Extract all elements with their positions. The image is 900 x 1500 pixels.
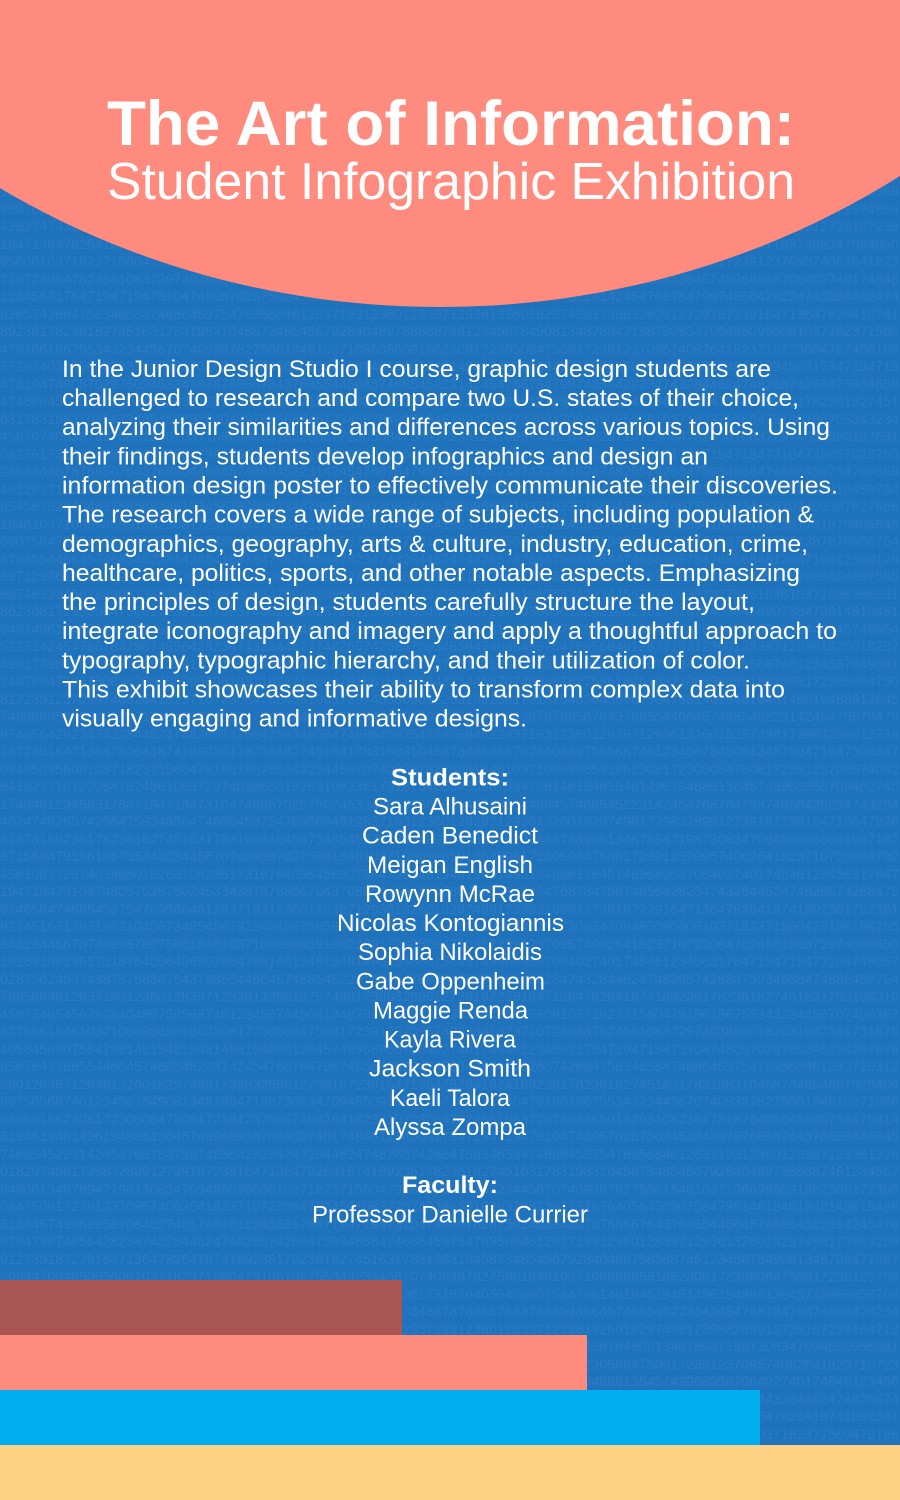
course description text block: information design poster to effectively communicate their discoveries. [62,472,838,500]
course description text block: healthcare, politics, sports, and other notable aspects. Emphasizing [62,560,800,587]
course description text block: demographics, geography, arts & culture, industry, education, crime, [62,531,808,558]
course description text block: analyzing their similarities and differences across various topics. Using [62,414,830,441]
students list: Nicolas Kontogiannis [337,910,564,937]
faculty heading: Faculty: [402,1172,498,1199]
students list: Meigan English [367,852,533,879]
students list: Jackson Smith [369,1056,531,1082]
header curved salmon shape [0,0,900,307]
course description text block: This exhibit showcases their ability to transform complex data into [62,676,785,704]
course description text block: visually engaging and informative designs. [62,706,527,732]
students list: Gabe Oppenheim [356,968,545,996]
bar: salmon [0,1335,587,1390]
faculty block: Professor Danielle Currier [312,1202,588,1228]
bar: bright blue [0,1390,760,1445]
students list: Kaeli Talora [390,1085,510,1112]
course description text block: their findings, students develop infographics and design an [62,444,708,470]
bar: dark red [0,1280,402,1335]
course description text block: typography, typographic hierarchy, and their utilization of color. [62,648,750,674]
students list: Maggie Renda [373,998,528,1024]
bar: yellow [0,1445,900,1500]
students heading: Students: [391,764,509,792]
title: The Art of Information: [107,89,795,159]
course description text block: integrate iconography and imagery and apply a thoughtful approach to [62,618,837,645]
students list: Sara Alhusaini [373,794,527,820]
course description text block: The research covers a wide range of subjects, including population & [62,502,814,528]
subtitle: Student Infographic Exhibition [107,153,795,211]
students list: Rowynn McRae [365,881,535,908]
students list: Caden Benedict [362,822,538,850]
students list [337,764,564,1141]
students list: Alyssa Zompa [374,1114,526,1141]
course description text block [62,356,838,732]
faculty block [312,1172,588,1228]
students list: Kayla Rivera [384,1026,516,1054]
course description text block: In the Junior Design Studio I course, graphic design students are [62,356,771,383]
course description text block: the principles of design, students carefully structure the layout, [62,589,755,616]
footer stepped colour bars [0,1280,900,1500]
title block [107,89,795,211]
students list: Sophia Nikolaidis [358,939,542,966]
course description text block: challenged to research and compare two U.S. states of their choice, [62,385,799,412]
